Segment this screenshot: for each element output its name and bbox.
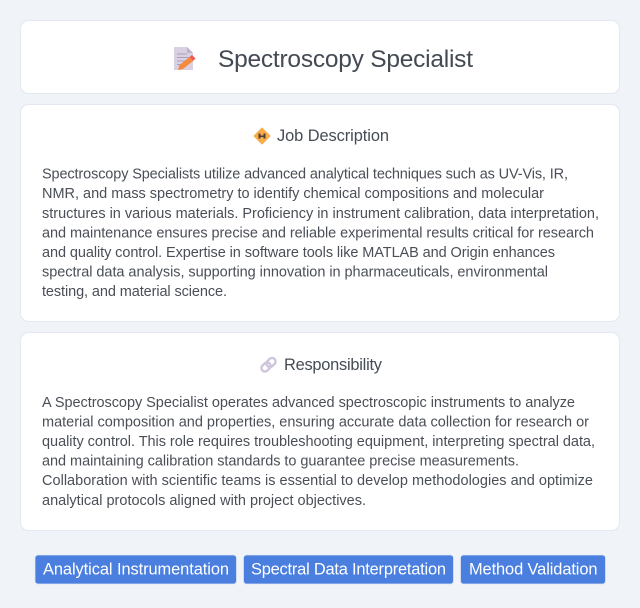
tag: method validation: Method Validation	[469, 560, 598, 578]
title: Spectroscopy Specialist	[218, 46, 473, 73]
text block: job description body	[42, 167, 599, 300]
heading: responsibility: Responsibility	[284, 356, 383, 374]
text block: job description body: NMR, and mass spectrometry to identify chemical compositions and molecular	[42, 186, 544, 202]
text block: responsibility body	[42, 395, 595, 509]
text block: responsibility body: and maintaining calibration standards to guarantee precise measurements.	[42, 454, 519, 470]
text block: responsibility body: Collaboration with scientific teams is essential to develop methodologies and optimize	[42, 473, 593, 489]
heading: job description: Job Description	[277, 127, 389, 145]
icon: orange diamond	[254, 128, 270, 144]
panel: job description	[20, 104, 620, 322]
text block: job description body: structures in various materials. Proficiency in instrument calibration, data interpretation,	[42, 206, 599, 222]
icon: chain link	[260, 356, 277, 373]
panel: responsibility	[20, 332, 620, 530]
tag: analytical instrumentation: Analytical Instrumentation	[43, 560, 229, 578]
text block: job description body: and quality control. Expertise in software tools like MATLAB and Origin enhances	[42, 245, 555, 261]
tag: method validation	[460, 555, 606, 584]
text block: responsibility body: material composition and properties, ensuring accurate data collection for research or	[42, 414, 589, 430]
text block: responsibility body: quality control. This role requires troubleshooting equipment, interpreting spectral data,	[42, 434, 595, 450]
text block: job description body: Spectroscopy Specialists utilize advanced analytical techniques such as UV-Vis, IR,	[42, 167, 568, 183]
text block: responsibility body: analytical protocols aligned with project objectives.	[42, 493, 366, 509]
tag: spectral data interpretation: Spectral Data Interpretation	[251, 560, 446, 578]
text block: responsibility body: A Spectroscopy Specialist operates advanced spectroscopic instruments to analyze	[42, 395, 575, 411]
panel: title card	[20, 20, 620, 94]
icon: document with pencil	[174, 47, 196, 70]
text block: job description body: testing, and material science.	[42, 284, 227, 300]
text block: job description body: and maintenance ensures precise and reliable experimental results critical for research	[42, 225, 594, 241]
tag: spectral data interpretation	[244, 555, 454, 584]
text block: job description body: spectral data analysis, supporting innovation in pharmaceuticals, environmental	[42, 265, 548, 281]
tag: analytical instrumentation	[35, 555, 236, 584]
